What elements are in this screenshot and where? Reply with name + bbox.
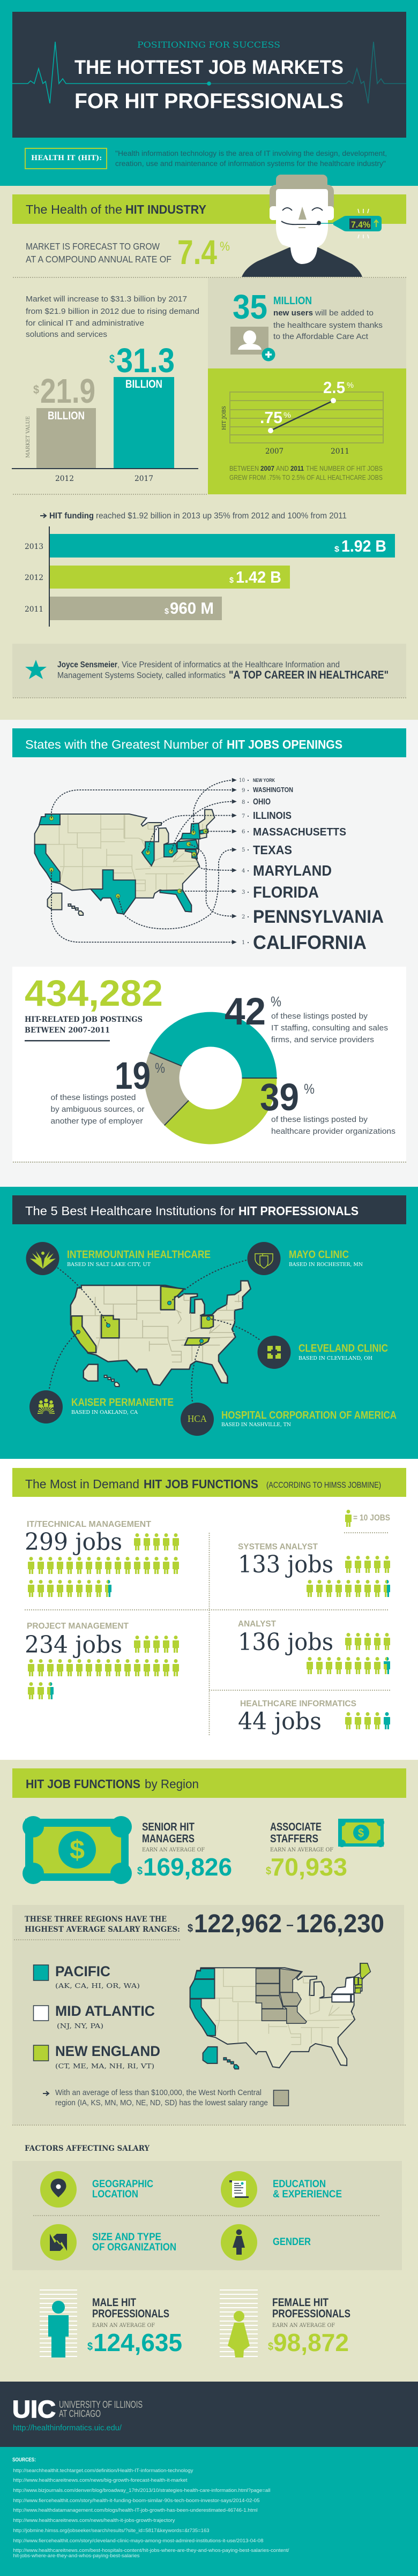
lowest salary note: With an average of less than $100,000, the West North Central	[55, 2089, 262, 2097]
salary range heading	[25, 1910, 384, 1938]
bar chart: HIT funding: 1.42 B	[236, 568, 281, 586]
panel: sources	[0, 2447, 418, 2576]
ranked state list: 10	[239, 778, 245, 784]
salary range heading: 126,230	[296, 1910, 384, 1938]
label: Intermountain	[67, 1249, 211, 1268]
ranked state list: OHIO	[253, 797, 271, 807]
heading: The 5 Best Healthcare Institutions for	[25, 1204, 235, 1218]
ranked state list: 3	[242, 890, 245, 895]
icon: star	[25, 660, 47, 679]
definition box: HEALTH IT (HIT):	[31, 154, 102, 162]
factor: size and type of organization: SIZE AND TYPE	[92, 2231, 161, 2243]
legend: Mid Atlantic: (NJ, NY, PA)	[57, 2022, 103, 2030]
title	[74, 56, 344, 113]
icon: large banknote	[23, 1816, 132, 1884]
ranked state list: 8	[242, 800, 245, 805]
ranked state list: WASHINGTON	[253, 786, 293, 794]
stat: 42%: IT staffing, consulting and sales	[271, 1023, 388, 1033]
icon: large banknote: $	[70, 1835, 85, 1865]
market increase text	[26, 295, 199, 339]
bar chart: market value: BILLION	[125, 378, 162, 390]
factor: education and experience: EDUCATION	[273, 2178, 326, 2190]
label: Cleveland Clinic: CLEVELAND CLINIC	[298, 1343, 388, 1354]
panel: jobs growth line chart: %	[283, 411, 291, 420]
stat: 39%: healthcare provider organizations	[271, 1127, 395, 1136]
function: analyst	[238, 1620, 390, 1674]
stat: 39%: of these listings posted by	[271, 1115, 368, 1124]
function: project management	[25, 1622, 179, 1699]
function: systems analyst: 133 jobs	[238, 1551, 333, 1578]
heading: HIT JOBS OPENINGS	[227, 737, 342, 751]
panel: 35 million: to the Affordable Care Act	[273, 332, 369, 341]
sources heading: SOURCES:	[12, 2457, 36, 2463]
legend: Pacific: PACIFIC	[55, 1963, 110, 1979]
funding statement: HIT funding	[49, 511, 94, 521]
panel: jobs growth line chart: 2011	[290, 465, 304, 472]
stat: 434,282: 434,282	[25, 973, 163, 1014]
stat: 19%: %	[155, 1060, 165, 1076]
icon: HCA	[181, 1403, 214, 1436]
panel: Joyce Sensmeier quote	[12, 644, 406, 698]
panel: jobs growth line chart: .75	[260, 408, 282, 427]
ranked state list: 5	[242, 847, 245, 853]
bar chart: market value: 2012	[55, 474, 74, 483]
logo: UIC: UIC	[12, 2396, 56, 2423]
panel: job functions by region	[0, 1760, 418, 2382]
panel: Joyce Sensmeier quote: Management Systems Society, called informatics	[57, 671, 226, 680]
stat: 42%: 42	[225, 991, 266, 1033]
legend: Pacific: (AK, CA, HI, OR, WA)	[55, 1982, 140, 1990]
stat: female professionals: FEMALE HIT	[272, 2296, 329, 2309]
ranked state list: FLORIDA	[253, 884, 319, 901]
postings label	[25, 1015, 143, 1041]
panel: jobs growth line chart: %	[347, 381, 354, 390]
factor: education and experience: & EXPERIENCE	[273, 2188, 342, 2200]
postings label: BETWEEN 2007-2011	[25, 1026, 110, 1035]
stat: 7.4%: %	[220, 239, 230, 254]
panel: jobs growth line chart	[208, 368, 406, 494]
bar chart: HIT funding: 2011	[25, 605, 43, 614]
panel: jobs growth line chart: 2.5	[323, 378, 345, 397]
stat: male professionals: EARN AN AVERAGE OF	[92, 2323, 155, 2329]
title: THE HOTTEST JOB MARKETS	[74, 56, 344, 78]
function: project management: 234 jobs	[25, 1631, 122, 1659]
panel: jobs growth line chart: HIT JOBS	[222, 406, 227, 430]
forecast text: AT A COMPOUND ANNUAL RATE OF	[26, 254, 171, 265]
stat: associate staffers: 70,933	[271, 1853, 347, 1881]
definition text: creation, use and maintenance of information systems for the healthcare industry"	[115, 160, 386, 168]
stat: associate staffers: STAFFERS	[270, 1833, 318, 1845]
panel: 35 million: new users	[273, 308, 313, 318]
stat: 42%: firms, and service providers	[271, 1035, 374, 1044]
heading: by Region	[145, 1777, 199, 1791]
stat: 39%: %	[304, 1081, 315, 1097]
stat: male professionals: $	[87, 2341, 93, 2353]
market increase text: for clinical IT and administrative	[26, 319, 144, 328]
ranked state list: PENNSYLVANIA	[253, 907, 384, 927]
ranked state list: 7	[242, 814, 245, 819]
ranked state list: 6	[242, 829, 245, 835]
panel: 35 million: the healthcare system thanks	[273, 321, 383, 330]
stat: 19%	[50, 1055, 165, 1126]
legend: New England	[33, 2043, 160, 2070]
bar chart: market value: MARKET VALUE	[26, 416, 31, 458]
panel: jobs growth line chart: BETWEEN	[229, 465, 259, 472]
lowest salary note: region (IA, KS, MN, MO, NE, ND, SD) has the lowest salary range	[55, 2099, 268, 2107]
stat: 39%: 39	[260, 1076, 299, 1119]
salary range heading: $	[188, 1923, 193, 1934]
funding statement: reached $1.92 billion in 2013 up 35% from 2012 and 100% from 2011	[96, 511, 347, 521]
panel: states with greatest number of jobs	[0, 720, 418, 1187]
stat: senior managers	[137, 1821, 232, 1881]
panel: health of the HIT industry	[0, 175, 418, 720]
stat: senior managers: $	[137, 1865, 143, 1877]
factor: geographic location	[40, 2171, 153, 2208]
panel: five best institutions	[0, 1187, 418, 1459]
definition text: "Health information technology is the area of IT involving the design, development,	[115, 149, 387, 157]
icon: Kaiser Permanente	[29, 1390, 63, 1423]
market increase text: Market will increase to $31.3 billion by 2017	[26, 295, 187, 304]
stat: female professionals: 98,872	[273, 2329, 349, 2356]
label: Hospital Corporation of America: BASED IN NASHVILLE, TN	[221, 1422, 291, 1428]
ranked state list: 1	[242, 940, 245, 946]
logo: UIC: UNIVERSITY OF ILLINOIS	[59, 2399, 143, 2410]
ranked state list: CALIFORNIA	[253, 931, 367, 953]
lowest salary note	[43, 2089, 288, 2107]
icon: man with thermometer	[242, 175, 382, 277]
website url: http://healthinformatics.uic.edu/	[13, 2424, 122, 2432]
icon: Intermountain	[26, 1242, 59, 1275]
postings label: HIT-RELATED JOB POSTINGS	[25, 1015, 143, 1024]
panel: job postings	[12, 967, 406, 1161]
source list: http://www.healthcareitnews.com/news/health-it-jobs-growth-trajectory	[13, 2518, 175, 2524]
panel: 35 million: MILLION	[273, 295, 312, 307]
stat: male professionals: 124,635	[93, 2329, 182, 2356]
label: Cleveland Clinic	[298, 1343, 388, 1361]
panel: regional salaries	[12, 1905, 404, 2125]
bar chart: market value	[12, 341, 198, 483]
factor: gender: GENDER	[273, 2236, 311, 2248]
function: systems analyst: SYSTEMS ANALYST	[238, 1542, 318, 1551]
salary range heading: 122,962	[194, 1910, 282, 1938]
function: project management: PROJECT MANAGEMENT	[27, 1622, 129, 1631]
ranked state list: 9	[242, 788, 245, 794]
label: Kaiser Permanente: BASED IN OAKLAND, CA	[71, 1410, 138, 1415]
stat: associate staffers: $	[266, 1865, 271, 1877]
function: IT technical management	[25, 1520, 179, 1597]
ranked state list	[239, 778, 384, 953]
stat: 7.4%: 7.4	[177, 233, 217, 272]
salary range heading: HIGHEST AVERAGE SALARY RANGES:	[25, 1925, 180, 1934]
bar chart: HIT funding: $	[334, 545, 340, 554]
stat: 19%: 19	[115, 1055, 151, 1097]
stat: female professionals: $	[268, 2341, 273, 2353]
factor: size and type of organization	[40, 2224, 176, 2261]
heading	[12, 1468, 406, 1497]
ranked state list: ILLINOIS	[253, 810, 292, 821]
bar chart: HIT funding: 2012	[25, 574, 43, 582]
forecast text: MARKET IS FORECAST TO GROW	[26, 241, 160, 252]
panel: most in demand job functions	[0, 1459, 418, 1760]
donut chart	[145, 1012, 277, 1144]
heading: HIT INDUSTRY	[125, 202, 206, 216]
panel: factors affecting salary	[12, 2161, 402, 2270]
icon: Cleveland Clinic	[257, 1336, 290, 1369]
stat: male professionals: PROFESSIONALS	[92, 2308, 169, 2320]
map: institutions	[49, 1260, 260, 1402]
icon: small banknote: $	[358, 1826, 364, 1840]
definition box	[25, 148, 107, 169]
source list: http://www.fiercehealthit.com/story/cleveland-clinic-mayo-among-most-admired-institutions-it-use/2013-04-08	[13, 2538, 264, 2544]
heading	[12, 728, 406, 757]
logo: UIC: AT CHICAGO	[59, 2408, 101, 2419]
heading: HIT JOB FUNCTIONS	[26, 1777, 140, 1791]
panel: jobs growth line chart: AND	[276, 465, 289, 472]
bar chart: HIT funding: 960 M	[170, 599, 214, 617]
factor: gender	[221, 2224, 311, 2261]
bar chart: market value: 31.3	[116, 341, 175, 380]
heading	[12, 194, 406, 224]
factor: geographic location: GEOGRAPHIC	[92, 2178, 153, 2190]
ranked state list: MASSACHUSETTS	[253, 826, 346, 838]
source list: hit-jobs-where-are-they-and-whos-paying-best-salaries	[13, 2553, 140, 2559]
legend: Mid Atlantic	[33, 2003, 155, 2030]
bar chart: HIT funding: $	[229, 576, 234, 585]
connector arrows	[51, 778, 237, 944]
panel: jobs growth line chart: 2011	[331, 447, 349, 456]
panel: header	[0, 0, 418, 186]
ranked state list: NEW YORK	[253, 778, 275, 783]
source list: http://searchhealthit.techtarget.com/definition/Health-IT-information-technology	[13, 2468, 193, 2474]
heading	[12, 1768, 406, 1798]
market increase text: solutions and services	[26, 330, 107, 339]
stat: female professionals: EARN AN AVERAGE OF	[272, 2323, 335, 2329]
heading: HIT JOB FUNCTIONS	[144, 1477, 258, 1491]
ranked state list: 4	[242, 868, 245, 874]
source list	[13, 2468, 289, 2559]
salary range heading: THESE THREE REGIONS HAVE THE	[25, 1915, 167, 1924]
map: salary regions	[190, 1963, 370, 2069]
icon: heartbeat line	[12, 42, 406, 103]
factor: size and type of organization: OF ORGANIZATION	[92, 2241, 176, 2253]
factors heading: FACTORS AFFECTING SALARY	[25, 2144, 150, 2153]
label: Cleveland Clinic: BASED IN CLEVELAND, OH	[298, 1355, 372, 1361]
label: Intermountain: BASED IN SALT LAKE CITY, UT	[67, 1262, 151, 1268]
panel: Joyce Sensmeier quote: , Vice President of informatics at the Healthcare Information and	[117, 660, 340, 669]
icon: small banknote	[338, 1819, 384, 1847]
panel: jobs growth line chart: 2007	[265, 447, 283, 456]
ranked state list: MARYLAND	[253, 862, 332, 879]
map: top ten states	[35, 810, 214, 915]
stat: female professionals	[220, 2290, 350, 2357]
logo: UIC	[12, 2396, 143, 2423]
heading: The Most in Demand	[25, 1477, 139, 1491]
bar chart: HIT funding: $	[165, 607, 169, 616]
definition text	[115, 149, 387, 168]
stat: senior managers: 169,826	[143, 1853, 232, 1881]
icon: Mayo Clinic	[248, 1242, 281, 1275]
function: IT technical management: IT/TECHNICAL MANAGEMENT	[27, 1520, 151, 1529]
source list: http://www.bizjournals.com/denver/blog/broadway_17th/2013/10/strategies-health-care-information.html?page=all	[13, 2488, 270, 2494]
panel: 35 million: 35	[233, 288, 267, 326]
bar chart: market value: 21.9	[40, 372, 95, 410]
label: Intermountain: INTERMOUNTAIN HEALTHCARE	[67, 1249, 211, 1261]
legend: one figure equals ten jobs	[345, 1510, 390, 1527]
stat: 19%: another type of employer	[50, 1117, 143, 1126]
bar chart: market value: 2017	[135, 474, 153, 483]
function: IT technical management: 299 jobs	[25, 1528, 122, 1556]
icon: man with thermometer: 7.4%	[351, 220, 370, 230]
bar chart: market value: BILLION	[48, 410, 85, 422]
legend: New England: NEW ENGLAND	[55, 2043, 160, 2059]
stat: male professionals: MALE HIT	[92, 2296, 136, 2309]
icon: add user	[230, 327, 275, 361]
stat: senior managers: MANAGERS	[142, 1833, 195, 1845]
label: Hospital Corporation of America	[221, 1410, 397, 1428]
stat: senior managers: EARN AN AVERAGE OF	[142, 1847, 205, 1853]
stat: associate staffers: EARN AN AVERAGE OF	[270, 1847, 333, 1853]
factor: education and experience	[221, 2171, 342, 2208]
panel: footer logo	[0, 2382, 418, 2447]
stat: male professionals	[40, 2290, 182, 2357]
forecast text	[26, 241, 171, 265]
label: Kaiser Permanente	[71, 1397, 174, 1415]
panel: Joyce Sensmeier quote: Joyce Sensmeier	[57, 660, 117, 669]
function: healthcare informatics	[238, 1699, 390, 1735]
stat: associate staffers: ASSOCIATE	[270, 1821, 322, 1833]
function: healthcare informatics: 44 jobs	[238, 1708, 322, 1735]
stat: 19%: by ambiguous sources, or	[50, 1105, 145, 1114]
ranked state list: 2	[242, 914, 245, 920]
panel: 35 million	[208, 278, 406, 368]
bar chart: HIT funding: 2013	[25, 543, 43, 551]
heading: The Health of the	[26, 202, 122, 216]
icon: HCA: HCA	[188, 1413, 207, 1424]
market increase text: from $21.9 billion in 2012 due to rising demand	[26, 307, 199, 316]
label: Mayo Clinic: BASED IN ROCHESTER, MN	[289, 1262, 363, 1268]
bar chart: market value: $	[33, 383, 39, 396]
label: Mayo Clinic: MAYO CLINIC	[289, 1249, 349, 1261]
bar chart: HIT funding	[25, 526, 395, 627]
bar chart: market value: $	[109, 352, 115, 366]
stat: 42%: %	[271, 993, 281, 1010]
source list: http://www.healthcareitnews.com/best-hospitals-content/hit-jobs-where-are-they-and-whos-paying-best-salaries-content/	[13, 2548, 289, 2554]
panel: 35 million: will be added to	[315, 308, 374, 318]
kicker: POSITIONING FOR SUCCESS	[137, 40, 280, 50]
factor: geographic location: LOCATION	[92, 2188, 138, 2200]
source list: http://www.healthcareitnews.com/news/big-growth-forecast-health-it-market	[13, 2477, 188, 2483]
source list: http://www.healthdatamanagement.com/blogs/health-IT-job-growth-has-been-underestimated-46746-1.html	[13, 2507, 257, 2513]
stat: 19%: of these listings posted	[50, 1093, 136, 1102]
function: systems analyst	[238, 1542, 390, 1597]
function: analyst: ANALYST	[238, 1620, 276, 1629]
heading: HIT PROFESSIONALS	[238, 1204, 359, 1218]
stat: associate staffers	[266, 1821, 347, 1881]
heading: States with the Greatest Number of	[25, 737, 223, 751]
legend: one figure equals ten jobs: = 10 JOBS	[353, 1513, 390, 1523]
label: Kaiser Permanente: KAISER PERMANENTE	[71, 1397, 174, 1408]
panel: jobs growth line chart: THE NUMBER OF HIT JOBS	[306, 465, 383, 472]
legend: Pacific	[33, 1963, 140, 1990]
label: Mayo Clinic	[289, 1249, 363, 1268]
stat: 39%	[260, 1076, 395, 1136]
function: healthcare informatics: HEALTHCARE INFORMATICS	[240, 1699, 356, 1708]
legend: Mid Atlantic: MID ATLANTIC	[55, 2003, 155, 2019]
source list: http://jobmine.himss.org/jobseeker/search/results/?site_id=5817&keywords=&t735=163	[13, 2528, 209, 2534]
stat: 42%	[225, 991, 388, 1044]
bar chart: HIT funding: 1.92 B	[341, 537, 386, 555]
function: analyst: 136 jobs	[238, 1629, 333, 1656]
panel: Joyce Sensmeier quote: "A TOP CAREER IN HEALTHCARE"	[229, 669, 389, 681]
heading	[12, 1195, 406, 1224]
stat: female professionals: PROFESSIONALS	[272, 2308, 350, 2320]
source list: http://www.fiercehealthit.com/story/health-it-funding-boom-similar-90s-tech-boom-investor-says/2014-02-05	[13, 2498, 260, 2504]
ranked state list: TEXAS	[253, 843, 292, 857]
heading: (ACCORDING TO HIMSS JOBMINE)	[266, 1481, 381, 1490]
stat: senior managers: SENIOR HIT	[142, 1821, 195, 1833]
legend: New England: (CT, ME, MA, NH, RI, VT)	[55, 2062, 154, 2070]
panel: jobs growth line chart: GREW FROM .75% TO 2.5% OF ALL HEALTHCARE JOBS	[229, 474, 383, 481]
panel: jobs growth line chart: 2007	[260, 465, 274, 472]
title: FOR HIT PROFESSIONALS	[74, 89, 344, 113]
stat: 42%: of these listings posted by	[271, 1012, 368, 1021]
